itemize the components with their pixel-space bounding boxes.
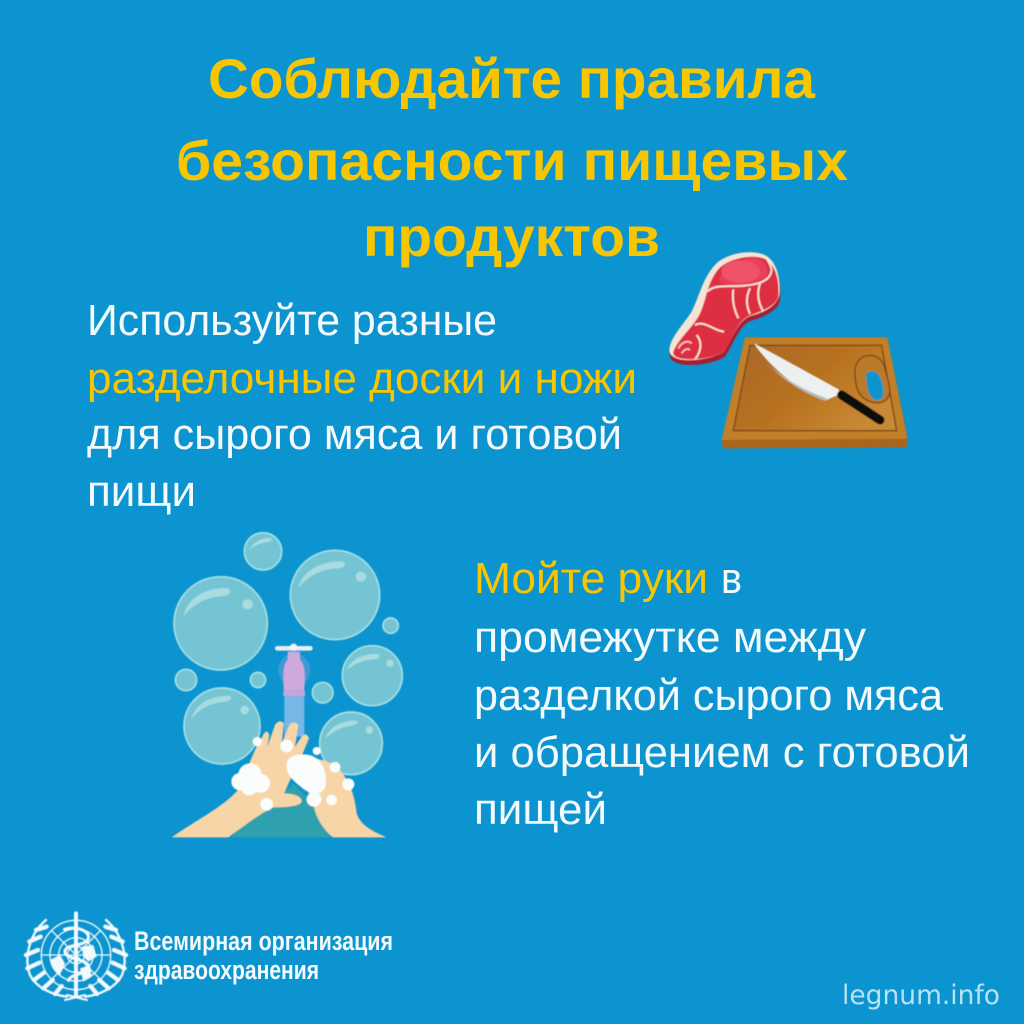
logo text: organisation name: Всемирная организация xyxy=(134,926,393,956)
continents xyxy=(50,945,97,982)
icon: knife xyxy=(754,343,880,420)
text block: wash hands xyxy=(474,554,970,834)
title: Соблюдайте правила xyxy=(208,47,816,110)
text block: wash hands: и обращением с готовой xyxy=(474,728,970,777)
text block: wash hands: в xyxy=(721,554,742,603)
logo text: organisation name: здравоохранения xyxy=(134,955,319,985)
faucet xyxy=(284,693,304,737)
hands xyxy=(172,721,309,837)
soap foam xyxy=(231,737,354,811)
text block: wash hands: промежутке между xyxy=(474,613,866,662)
text block: wash hands: Мойте руки xyxy=(474,554,708,603)
text block: wash hands: разделкой сырого мяса xyxy=(474,671,944,720)
text block: cutting boards xyxy=(87,296,637,516)
title: продуктов xyxy=(363,205,660,268)
globe xyxy=(41,920,111,990)
text block: cutting boards: разделочные доски и ножи xyxy=(87,354,637,403)
staff and serpent xyxy=(63,913,88,997)
bubbles xyxy=(174,533,402,775)
watermark: legnum.info xyxy=(842,980,1000,1011)
text block: wash hands: пищей xyxy=(474,785,607,834)
icon: handwashing with bubbles xyxy=(172,533,402,837)
bubble highlights xyxy=(183,538,394,738)
title xyxy=(176,47,848,268)
text block: cutting boards: пищи xyxy=(87,467,196,516)
icon: cutting board with knife xyxy=(722,337,907,448)
text block: cutting boards: Используйте разные xyxy=(87,296,497,345)
title: безопасности пищевых xyxy=(176,129,848,192)
icon: raw meat xyxy=(669,252,780,365)
logo text: organisation name xyxy=(134,926,393,985)
text block: cutting boards: для сырого мяса и готовой xyxy=(87,410,622,459)
laurel wreath xyxy=(26,920,126,1000)
logo: WHO emblem xyxy=(26,913,126,1000)
water xyxy=(232,783,337,837)
